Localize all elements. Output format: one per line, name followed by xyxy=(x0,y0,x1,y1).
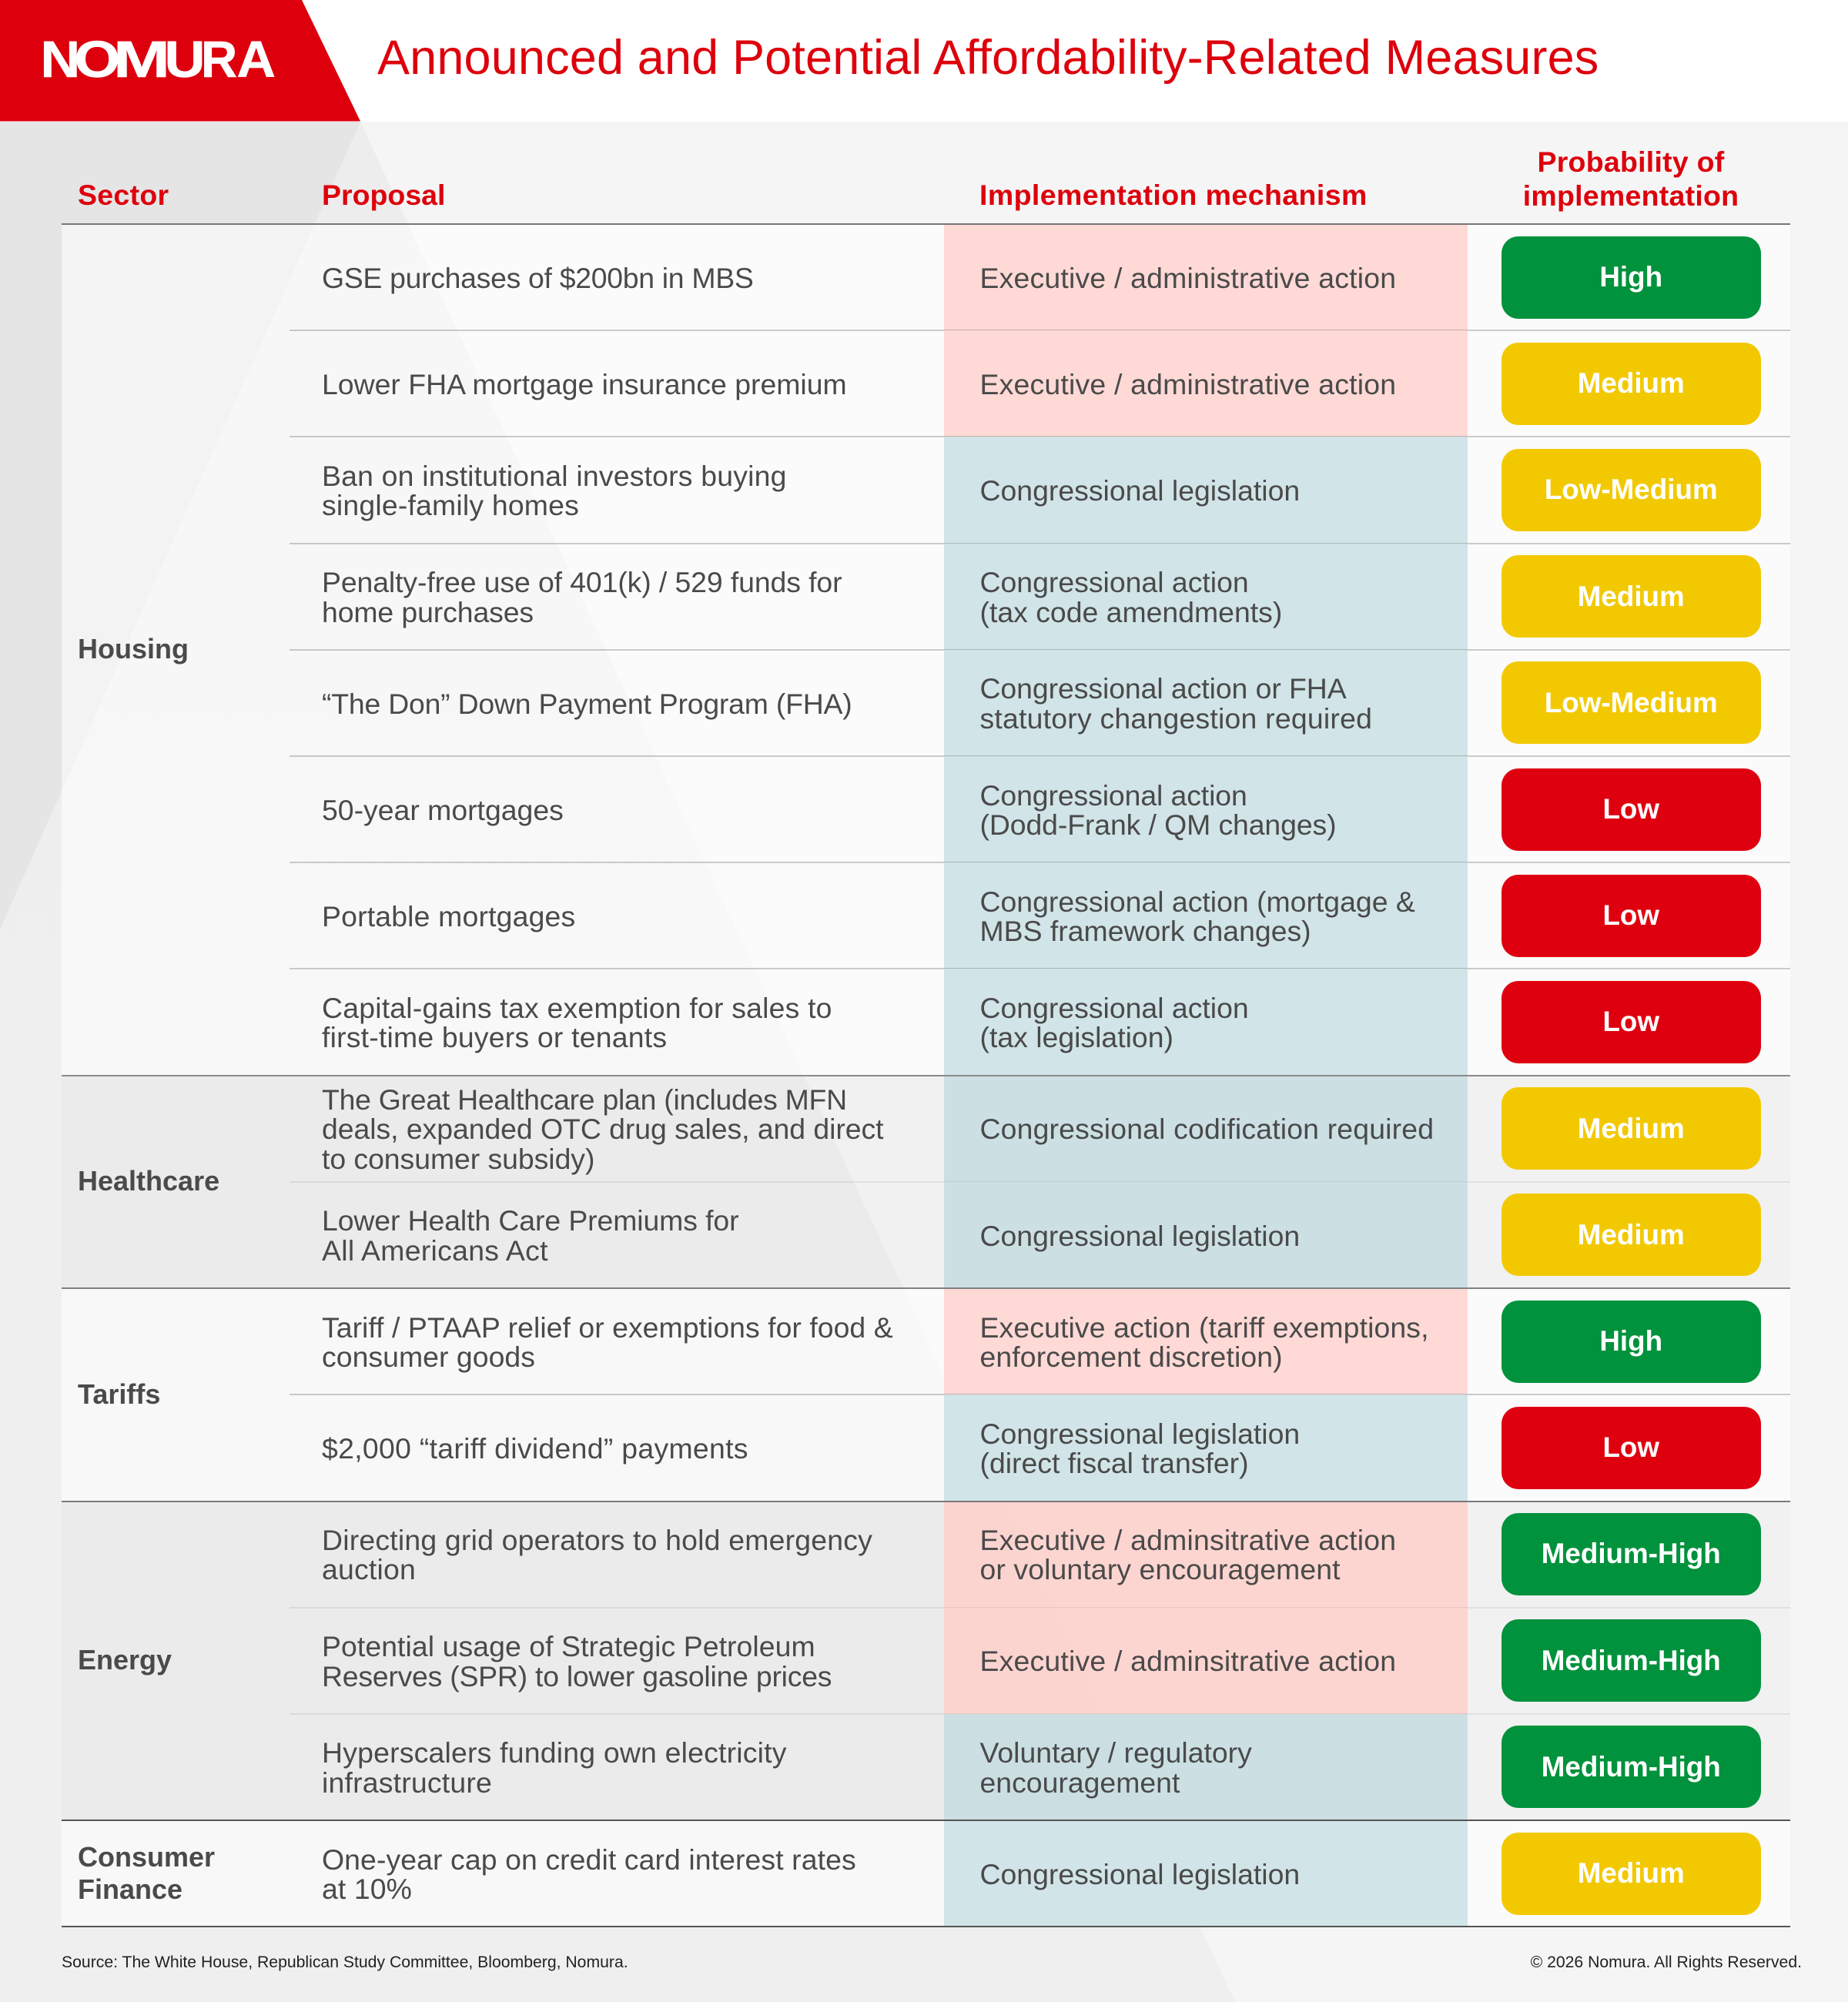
row: 401(k) funds xyxy=(290,544,1790,650)
row: tariff dividend: Low xyxy=(1602,1431,1659,1463)
row: hyperscalers: encouragement xyxy=(979,1766,1180,1799)
row: institutional investor ban xyxy=(290,437,1790,544)
row: grid operators: or voluntary encouragement xyxy=(979,1553,1341,1585)
row: FHA premium: Lower FHA mortgage insurance premium xyxy=(322,368,847,400)
row: grid operators: Medium-High xyxy=(1542,1538,1721,1569)
row: credit card cap: at 10% xyxy=(322,1873,412,1905)
row: 50-year mortgages xyxy=(290,756,1790,862)
row: Great Healthcare plan: Medium xyxy=(1578,1113,1685,1144)
row: Great Healthcare plan: deals, expanded OTC drug sales, and direct xyxy=(322,1113,884,1145)
row: Great Healthcare plan: to consumer subsidy) xyxy=(322,1143,594,1175)
row: Lower Health Care Premiums: Medium xyxy=(1578,1219,1685,1250)
row: The Don program: statutory changestion required xyxy=(979,702,1372,735)
row: 50-year mortgages: Congressional action xyxy=(979,779,1247,812)
row: GSE purchases xyxy=(290,224,1790,330)
row: Lower Health Care Premiums: Lower Health Care Premiums for xyxy=(322,1204,738,1237)
logo: Nomura red header block: O xyxy=(74,31,120,89)
row: tariff relief: Tariff / PTAAP relief or exemptions for food & xyxy=(322,1311,893,1344)
row: FHA premium xyxy=(290,330,1790,437)
sector label: consumer finance: Finance xyxy=(78,1873,182,1905)
row: portable mortgages: Portable mortgages xyxy=(322,900,575,932)
row: capital-gains exemption xyxy=(322,969,1761,1075)
panel: healthcare xyxy=(62,1076,1790,1288)
row: tariff relief: enforcement discretion) xyxy=(979,1341,1283,1373)
logo: Nomura red header block: N xyxy=(40,31,80,89)
row: The Don program xyxy=(290,650,1790,756)
row: grid operators: Directing grid operators to hold emergency xyxy=(322,1524,872,1556)
row: tariff dividend xyxy=(322,1394,1761,1501)
row: grid operators: Executive / adminsitrative action xyxy=(979,1524,1396,1556)
row: hyperscalers xyxy=(322,1714,1761,1820)
sector label: healthcare: Healthcare xyxy=(78,1165,219,1197)
column heading: sector: Sector xyxy=(78,179,169,211)
row: 401(k) funds: (tax code amendments) xyxy=(979,596,1282,628)
sector label: consumer finance: Consumer xyxy=(78,1840,215,1873)
row: institutional investor ban: single-family homes xyxy=(322,489,579,521)
row: 50-year mortgages: (Dodd-Frank / QM changes) xyxy=(979,808,1336,841)
row: capital-gains exemption: Capital-gains tax exemption for sales to xyxy=(322,992,832,1024)
row: portable mortgages xyxy=(290,862,1790,969)
row: grid operators: auction xyxy=(322,1553,416,1585)
row: 401(k) funds: Penalty-free use of 401(k) / 529 funds for xyxy=(322,566,842,598)
row: hyperscalers: infrastructure xyxy=(322,1766,492,1799)
row: GSE purchases: GSE purchases of $200bn in MBS xyxy=(322,262,753,294)
column heading: probability of implementation: implementation xyxy=(1523,179,1739,212)
row: Great Healthcare plan: Congressional codification required xyxy=(979,1113,1434,1145)
row: 401(k) funds: home purchases xyxy=(322,596,534,628)
row: credit card cap: One-year cap on credit card interest rates xyxy=(322,1843,856,1876)
column heading: probability of implementation: Probability of xyxy=(1537,146,1725,178)
row: Lower Health Care Premiums xyxy=(322,1182,1761,1287)
row: Lower Health Care Premiums: Congressional legislation xyxy=(979,1220,1300,1252)
row: strategic petroleum reserves: Potential usage of Strategic Petroleum xyxy=(322,1630,815,1662)
row: strategic petroleum reserves: Medium-High xyxy=(1542,1645,1721,1676)
logo: Nomura red header block: M xyxy=(113,31,170,89)
row: portable mortgages: Congressional action (mortgage & xyxy=(979,886,1415,918)
row: tariff relief: consumer goods xyxy=(322,1341,535,1373)
row: hyperscalers: Hyperscalers funding own electricity xyxy=(322,1736,787,1769)
title: Announced and Potential Affordability-Related Measures xyxy=(377,31,1599,85)
row: institutional investor ban: Ban on institutional investors buying xyxy=(322,460,787,492)
row: strategic petroleum reserves: Executive / adminsitrative action xyxy=(979,1645,1396,1677)
logo: Nomura red header block: U xyxy=(165,31,205,89)
row: capital-gains exemption: Congressional action xyxy=(979,992,1249,1024)
row: tariff dividend: Congressional legislation xyxy=(979,1418,1300,1450)
row: credit card cap xyxy=(322,1821,1761,1926)
row: Great Healthcare plan: The Great Healthcare plan (includes MFN xyxy=(322,1083,847,1116)
row: Lower Health Care Premiums: All Americans Act xyxy=(322,1234,548,1267)
row: tariff relief: High xyxy=(1599,1325,1662,1357)
row: credit card cap: Medium xyxy=(1578,1857,1685,1889)
row: institutional investor ban: Low-Medium xyxy=(1545,474,1718,505)
panel: consumer finance xyxy=(62,1820,1790,1927)
row: portable mortgages: MBS framework changes) xyxy=(979,915,1311,947)
panel: energy xyxy=(62,1501,1790,1820)
copyright note: © 2026 Nomura. All Rights Reserved. xyxy=(1531,1953,1802,1971)
row: portable mortgages: Low xyxy=(1602,899,1659,931)
row: The Don program: Low-Medium xyxy=(1545,687,1718,718)
column heading: implementation mechanism: Implementation mechanism xyxy=(979,179,1368,211)
row: tariff relief xyxy=(290,1288,1790,1394)
row: 401(k) funds: Congressional action xyxy=(979,566,1249,598)
row: tariff relief: Executive action (tariff exemptions, xyxy=(979,1311,1429,1344)
source note: Source: The White House, Republican Study Committee, Bloomberg, Nomura. xyxy=(62,1953,628,1971)
sector label: tariffs: Tariffs xyxy=(78,1378,160,1410)
row: strategic petroleum reserves xyxy=(290,1608,1790,1714)
sector label: housing: Housing xyxy=(78,633,189,665)
row: strategic petroleum reserves: Reserves (SPR) to lower gasoline prices xyxy=(322,1660,832,1692)
row: tariff dividend: (direct fiscal transfer) xyxy=(979,1447,1249,1479)
row: tariff dividend: $2,000 “tariff dividend” payments xyxy=(322,1432,748,1465)
row: GSE purchases: High xyxy=(1599,261,1662,293)
row: hyperscalers: Voluntary / regulatory xyxy=(979,1736,1252,1769)
row: The Don program: “The Don” Down Payment Program (FHA) xyxy=(322,688,852,720)
row: 50-year mortgages: 50-year mortgages xyxy=(322,794,564,826)
row: grid operators xyxy=(290,1501,1790,1608)
sector label: energy: Energy xyxy=(78,1644,172,1676)
row: 50-year mortgages: Low xyxy=(1602,793,1659,825)
panel: tariffs xyxy=(62,1288,1790,1501)
row: capital-gains exemption: (tax legislation) xyxy=(979,1021,1173,1053)
row: The Don program: Congressional action or FHA xyxy=(979,672,1347,705)
panel: housing xyxy=(62,224,1790,1076)
logo: Nomura red header block: A xyxy=(237,31,276,89)
row: capital-gains exemption: first-time buyers or tenants xyxy=(322,1021,667,1053)
row: 401(k) funds: Medium xyxy=(1578,581,1685,612)
row: FHA premium: Medium xyxy=(1578,367,1685,399)
row: Great Healthcare plan xyxy=(290,1076,1790,1182)
row: GSE purchases: Executive / administrative action xyxy=(979,262,1396,294)
column heading: probability of implementation xyxy=(1523,146,1739,212)
row: credit card cap: Congressional legislation xyxy=(979,1858,1300,1890)
column heading: proposal: Proposal xyxy=(322,179,445,211)
logo: Nomura red header block: R xyxy=(201,31,237,89)
row: institutional investor ban: Congressional legislation xyxy=(979,474,1300,507)
row: FHA premium: Executive / administrative action xyxy=(979,368,1396,400)
logo: Nomura red header block xyxy=(0,0,360,122)
row: capital-gains exemption: Low xyxy=(1602,1006,1659,1037)
sector label: consumer finance xyxy=(78,1840,215,1905)
row: hyperscalers: Medium-High xyxy=(1542,1751,1721,1783)
